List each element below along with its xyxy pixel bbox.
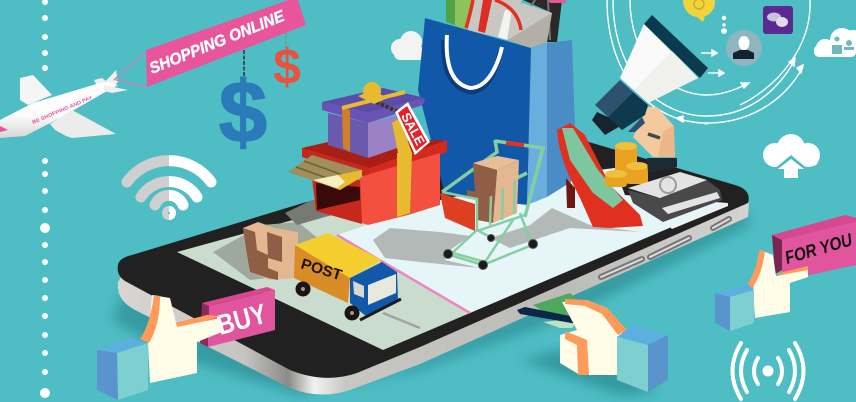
bottom hand shadow bbox=[520, 350, 660, 395]
red box bbox=[302, 140, 447, 178]
broadcast circles and arrows bbox=[607, 0, 810, 124]
buy sign: BUY bbox=[214, 298, 270, 341]
for you sign bbox=[772, 215, 856, 275]
truck wheels bbox=[296, 282, 359, 320]
banner ropes bbox=[114, 52, 147, 87]
screen: pale side bbox=[337, 168, 728, 313]
icon: broadcast signal bbox=[732, 343, 804, 399]
phone black face bbox=[118, 135, 749, 378]
banner: shopping online: SHOPPING ONLINE bbox=[147, 8, 288, 78]
side speakers bbox=[601, 219, 729, 277]
icon: purple chat square bbox=[763, 6, 793, 34]
road and item shadows bbox=[213, 198, 640, 328]
bag handle bbox=[444, 35, 502, 92]
dotted vertical line bbox=[40, 0, 50, 398]
sale tag bbox=[395, 102, 430, 155]
red high heel bbox=[557, 123, 643, 228]
megaphone hand bbox=[633, 107, 677, 173]
smartphone bbox=[118, 135, 749, 395]
cart frame bbox=[442, 180, 532, 265]
cart box bbox=[493, 160, 519, 223]
striped flap bbox=[288, 155, 362, 190]
right hand with cuff bbox=[715, 250, 808, 331]
buy sign bbox=[200, 287, 275, 347]
icon: yellow speech bubble bbox=[683, 0, 715, 22]
screen: sage side bbox=[177, 190, 500, 350]
phone silver rim bbox=[118, 185, 749, 395]
cart wheels bbox=[444, 234, 538, 270]
money stack bbox=[628, 172, 728, 229]
airplane: BE SHOPPING AND PAY bbox=[31, 95, 94, 126]
shopping bag bbox=[418, 0, 575, 205]
cloud behind bag bbox=[391, 31, 426, 60]
megaphone bbox=[592, 15, 708, 135]
icon: person bbox=[726, 30, 762, 66]
bag front bbox=[418, 18, 531, 205]
cart rear frame bbox=[442, 140, 543, 217]
bag side bbox=[527, 43, 547, 205]
post truck: POST bbox=[299, 256, 344, 284]
hanging blue dollar: $ bbox=[219, 64, 267, 161]
hanging red dollar: $ bbox=[273, 39, 301, 95]
gift boxes bbox=[288, 82, 447, 225]
post truck bbox=[294, 233, 401, 320]
gold coins bbox=[605, 142, 648, 187]
phone shadow bbox=[112, 210, 750, 395]
bow bbox=[358, 82, 388, 104]
left hand with cuff bbox=[97, 295, 222, 400]
cart red panel bbox=[440, 193, 475, 231]
icon: wifi bbox=[127, 161, 211, 216]
parcels bbox=[243, 222, 298, 280]
sale tag: SALE bbox=[398, 110, 428, 148]
bag contents bbox=[446, 0, 566, 48]
icon: community cloud bbox=[814, 28, 856, 57]
credit card bbox=[517, 293, 590, 328]
shopping cart bbox=[440, 140, 543, 270]
airplane bbox=[0, 70, 128, 138]
bottom hand with cuff bbox=[560, 299, 668, 392]
purple box bbox=[328, 113, 368, 158]
icon: cloud upload bbox=[763, 134, 820, 180]
